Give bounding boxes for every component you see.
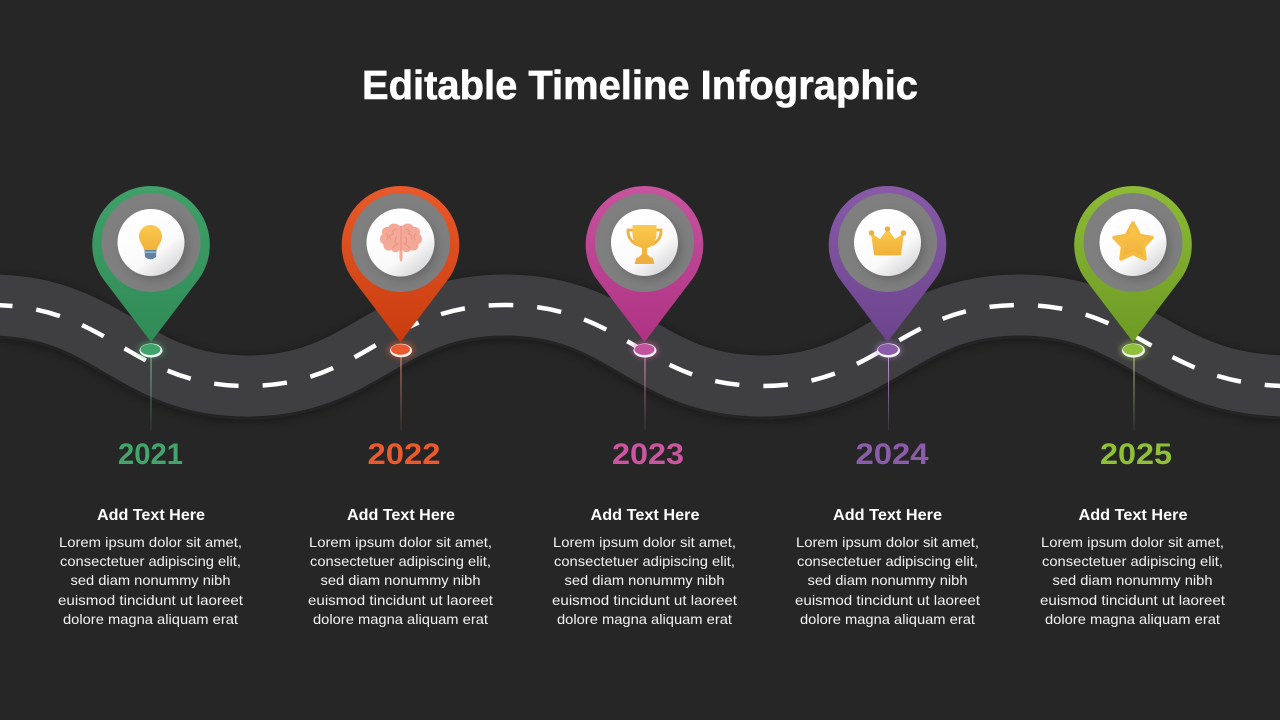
body text 2025: euismod tincidunt ut laoreet [1040, 592, 1225, 608]
heading 2023: Add Text Here [590, 507, 700, 524]
body text 2022: sed diam nonummy nibh [320, 572, 480, 588]
icon: light bulb [139, 225, 162, 259]
body text 2021 [58, 534, 243, 627]
marker dot 2024 [874, 341, 902, 359]
body text 2022: Lorem ipsum dolor sit amet, [309, 534, 492, 550]
body text 2024: sed diam nonummy nibh [808, 572, 968, 588]
marker dot 2025 [1120, 341, 1148, 359]
timeline item 2022 [308, 186, 493, 627]
body text 2022: dolore magna aliquam erat [313, 611, 488, 627]
body text 2025: consectetuer adipiscing elit, [1042, 553, 1223, 569]
timeline item 2025 [1040, 186, 1225, 627]
connector line 2022 [400, 356, 402, 430]
body text 2023: euismod tincidunt ut laoreet [552, 592, 737, 608]
body text 2023: consectetuer adipiscing elit, [554, 553, 735, 569]
year 2023: 2023 [612, 438, 684, 471]
heading 2022: Add Text Here [347, 507, 455, 524]
body text 2021: euismod tincidunt ut laoreet [58, 592, 243, 608]
marker dot 2021 [137, 341, 165, 359]
year 2021: 2021 [118, 438, 183, 471]
heading 2024: Add Text Here [833, 507, 942, 524]
year 2024: 2024 [856, 438, 929, 471]
body text 2025 [1040, 534, 1225, 627]
body text 2021: consectetuer adipiscing elit, [60, 553, 241, 569]
title: Editable Timeline Infographic [362, 62, 918, 108]
body text 2022: euismod tincidunt ut laoreet [308, 592, 493, 608]
body text 2023: sed diam nonummy nibh [564, 572, 724, 588]
timeline item 2023 [552, 186, 737, 627]
body text 2024: dolore magna aliquam erat [800, 611, 975, 627]
body text 2025: sed diam nonummy nibh [1052, 572, 1212, 588]
timeline item 2024 [795, 186, 980, 627]
icon: trophy [628, 225, 661, 264]
marker dot 2023 [631, 341, 659, 359]
timeline item 2021 [58, 186, 243, 627]
icon: crown [869, 226, 906, 256]
icon: brain [380, 224, 422, 262]
connector line 2023 [644, 356, 646, 430]
map pin 2024 [829, 186, 946, 342]
connector line 2024 [888, 356, 889, 430]
body text 2024: euismod tincidunt ut laoreet [795, 592, 980, 608]
body text 2025: dolore magna aliquam erat [1045, 611, 1220, 627]
connector line 2025 [1134, 356, 1135, 430]
body text 2022: consectetuer adipiscing elit, [310, 553, 491, 569]
map pin 2022 [342, 186, 459, 342]
body text 2021: sed diam nonummy nibh [70, 572, 230, 588]
body text 2022 [308, 534, 493, 627]
icon: star [1114, 223, 1152, 259]
body text 2021: Lorem ipsum dolor sit amet, [59, 534, 242, 550]
body text 2023: dolore magna aliquam erat [557, 611, 732, 627]
heading 2021: Add Text Here [97, 507, 205, 524]
body text 2021: dolore magna aliquam erat [63, 611, 238, 627]
body text 2024: Lorem ipsum dolor sit amet, [796, 534, 979, 550]
body text 2025: Lorem ipsum dolor sit amet, [1041, 534, 1224, 550]
body text 2024: consectetuer adipiscing elit, [797, 553, 978, 569]
year 2022: 2022 [368, 438, 440, 471]
map pin 2023 [586, 186, 703, 342]
body text 2024 [795, 534, 980, 627]
map pin 2025 [1074, 186, 1192, 342]
heading 2025: Add Text Here [1078, 507, 1188, 524]
map pin 2021 [92, 186, 210, 342]
connector line 2021 [150, 356, 152, 430]
body text 2023 [552, 534, 737, 627]
winding road [0, 305, 1280, 389]
marker dot 2022 [387, 341, 415, 359]
year 2025: 2025 [1100, 438, 1172, 471]
body text 2023: Lorem ipsum dolor sit amet, [553, 534, 736, 550]
